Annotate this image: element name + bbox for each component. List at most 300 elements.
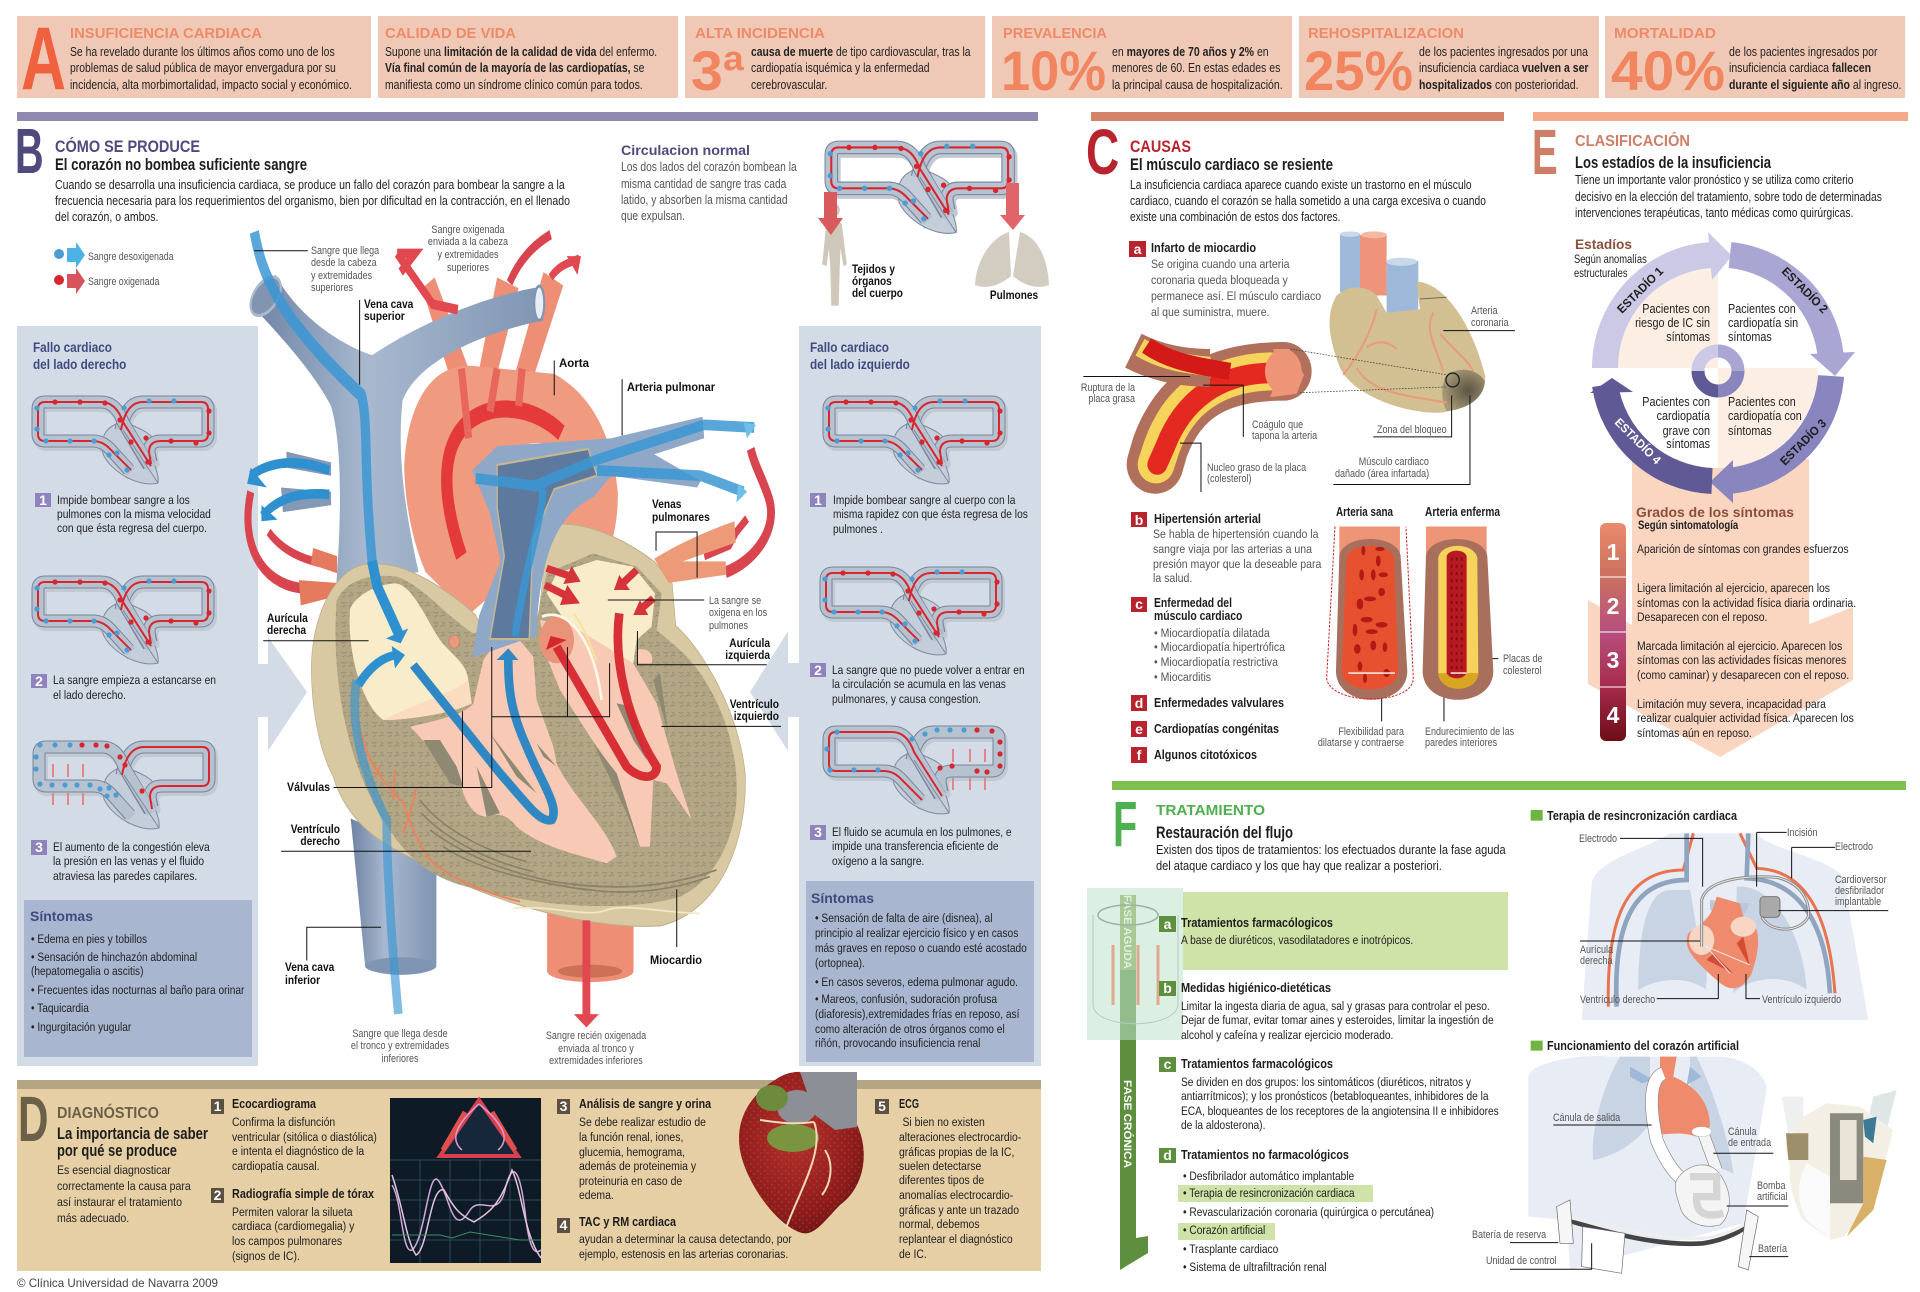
legend: blood types: Sangre desoxigenada	[88, 251, 174, 263]
cause a	[1129, 240, 1321, 319]
item 3 analisis: glucemia, hemograma,	[579, 1146, 685, 1159]
resync labels: Cardioversor	[1835, 874, 1887, 886]
arrow: pale pointing to heart	[258, 637, 307, 751]
artery labels: Flexibilidad para	[1338, 726, 1404, 738]
resync labels: implantable	[1835, 896, 1881, 908]
pulmonary artery	[472, 417, 704, 658]
cause f: f	[1137, 747, 1142, 763]
footer credit: © Clínica Universidad de Navarra 2009	[17, 1276, 218, 1290]
main heart: great vessels in front and outer flows	[397, 235, 771, 1027]
step 1: Impide bombear sangre a los	[57, 494, 190, 507]
symptoms grades: (como caminar) y desaparecen con el reposo.	[1637, 669, 1849, 682]
stages cycle: ESTADÍO 2	[1779, 265, 1831, 316]
section E header: intervenciones terapéuticas, tanto médicas como quirúrgicas.	[1575, 206, 1853, 220]
heart labels: Aurícula	[729, 637, 771, 650]
stages cycle: síntomas	[1728, 329, 1772, 344]
section E header: Tiene un importante valor pronóstico y se utiliza como criterio	[1575, 173, 1854, 187]
treatment a	[1159, 915, 1413, 947]
translucent cylinder overlay	[1087, 888, 1183, 1040]
symptoms box: right side: • Ingurgitación yugular	[31, 1021, 132, 1034]
panel: left side failure: Fallo cardiaco	[810, 339, 889, 355]
cause a: Se origina cuando una arteria	[1151, 258, 1290, 271]
main heart: interior chambers	[336, 553, 737, 913]
arrow: pale pointing to heart from right	[750, 631, 799, 751]
section F header: F	[1113, 790, 1137, 860]
center mini cycle	[1698, 351, 1738, 391]
heart labels: inferiores	[381, 1053, 419, 1065]
section B header: B	[15, 117, 44, 187]
section F header: Existen dos tipos de tratamientos: los efectuados durante la fase aguda	[1156, 842, 1506, 857]
heart labels: izquierda	[725, 649, 771, 662]
cause c: • Miocardiopatía dilatada	[1154, 627, 1270, 640]
resync labels: Ventrículo derecho	[1580, 994, 1655, 1006]
stages heading: Según anomalías	[1574, 253, 1647, 266]
legend: blood types: Sangre oxigenada	[88, 276, 160, 288]
cause c	[1131, 596, 1286, 684]
artificial heart illustration	[1510, 1041, 1788, 1273]
item 5 ecg: suelen detectarse	[899, 1160, 981, 1173]
left ventricle trabeculae	[593, 649, 668, 847]
right pulmonary veins/arteries	[281, 452, 331, 512]
resync labels: derecha	[1580, 955, 1613, 967]
stages cycle: ESTADÍO 4	[1612, 416, 1664, 467]
superior vena cava	[251, 275, 544, 583]
item 5 ecg: 5	[878, 1098, 886, 1114]
item 4 tac: TAC y RM cardiaca	[579, 1214, 677, 1229]
heart labels: Sangre oxigenada	[431, 224, 505, 236]
big letter A: A	[21, 9, 66, 109]
healthy artery	[1327, 527, 1413, 700]
cause f: Algunos citotóxicos	[1154, 747, 1257, 762]
panel: left side failure: del lado izquierdo	[810, 356, 910, 372]
section C header	[1086, 117, 1486, 224]
section B header: CÓMO SE PRODUCE	[55, 137, 200, 156]
step 2	[810, 662, 1025, 706]
section C header: C	[1086, 117, 1119, 188]
artery section illustration	[1133, 346, 1304, 464]
section C header: cardiaco, cuando el corazón se halla sometido a una carga excesiva o cuando	[1130, 194, 1486, 208]
step 3: 3	[814, 824, 822, 840]
symptoms box: right side: Síntomas	[30, 908, 93, 924]
treatment c: de la aldosterona).	[1181, 1119, 1265, 1132]
banner: prevalencia: menores de 60. En estas edades es	[1112, 60, 1280, 75]
phase bar: FASE CRÓNICA	[1121, 1080, 1134, 1168]
heart labels: Vena cava	[364, 298, 414, 311]
cause a: al que suministra, muere.	[1151, 306, 1270, 319]
artery labels: coronaria	[1471, 317, 1509, 329]
symptoms grades: Ligera limitación al ejercicio, aparecen los	[1637, 582, 1830, 595]
panel D: diagnostico: DIAGNÓSTICO	[57, 1103, 159, 1122]
item 5 ecg	[875, 1096, 1022, 1261]
heart labels: derecho	[300, 835, 340, 848]
banner: alta incidencia: cardiopatía isquémica y la enfermedad	[751, 61, 930, 75]
striated myocardium	[420, 800, 717, 892]
step 2: La sangre empieza a estancarse en	[53, 674, 216, 687]
banner: rehospitalizacion: hospitalizados con posterioridad.	[1419, 77, 1579, 92]
heading: resynchronization: Terapia de resincronización cardiaca	[1547, 808, 1738, 823]
step 1	[810, 492, 1028, 536]
coronary vessels	[362, 733, 520, 902]
heart outer wall	[311, 524, 745, 926]
item 1 ecocardiograma: ventricular (sitólica o diastólica)	[232, 1131, 377, 1144]
artery labels: Zona del bloqueo	[1377, 424, 1447, 436]
heart labels: derecha	[267, 624, 307, 637]
section B header: El corazón no bombea suficiente sangre	[55, 155, 307, 174]
artery labels: tapona la arteria	[1252, 430, 1317, 442]
treatment b	[1159, 980, 1494, 1042]
artery labels: placa grasa	[1088, 393, 1135, 405]
labels: tissues and lungs: Pulmones	[990, 289, 1038, 302]
banner: rehospitalizacion: REHOSPITALIZACION	[1308, 26, 1464, 42]
panel D: diagnostico: La importancia de saber	[57, 1124, 208, 1143]
normal circulation diagram	[818, 144, 1049, 305]
normal circulation text: misma cantidad de sangre tras cada	[621, 177, 787, 191]
banner: alta incidencia: 3ª	[691, 39, 744, 102]
panel: right side failure: del lado derecho	[33, 356, 126, 372]
banner: insuficiencia cardiaca: INSUFICIENCIA CARDIACA	[70, 26, 263, 42]
item 3 analisis	[557, 1096, 712, 1202]
banner: alta incidencia: ALTA INCIDENCIA	[695, 26, 826, 42]
banner: alta incidencia	[685, 16, 985, 102]
section F header: del ataque cardiaco y los que hay que realizar a posteriori.	[1156, 858, 1442, 873]
big pale arrow	[1588, 459, 1853, 757]
treatment d: • Trasplante cardiaco	[1183, 1243, 1278, 1256]
SVC blue flow	[254, 232, 372, 561]
treatment c: Se dividen en dos grupos: los sintomáticos (diuréticos, nitratos y	[1181, 1076, 1471, 1089]
symptoms grades: realizar cualquier actividad física. Aparecen los	[1637, 712, 1854, 725]
heart with infarct	[1290, 231, 1485, 413]
phase bar	[1120, 895, 1148, 1270]
resync labels: Electrodo	[1835, 841, 1873, 853]
step 3: atraviesa las paredes capilares.	[53, 870, 197, 883]
stages cycle: ESTADÍO 3	[1778, 416, 1829, 468]
symptoms grades: síntomas con la actividad física diaria ordinaria.	[1637, 597, 1856, 610]
grade bar: 2	[1607, 593, 1619, 619]
artery labels: Placas de	[1503, 653, 1543, 665]
section E header: Los estadíos de la insuficiencia	[1575, 153, 1771, 172]
cause e	[1131, 721, 1279, 737]
heart labels: Sangre que llega desde	[352, 1028, 448, 1040]
stages cycle: ESTADÍO 1	[1615, 264, 1666, 316]
cause a: a	[1134, 241, 1142, 257]
artificial heart labels: de entrada	[1728, 1137, 1771, 1149]
banner: prevalencia: 10%	[1001, 39, 1106, 102]
section F header: TRATAMIENTO	[1156, 802, 1265, 819]
banner: mortalidad	[1605, 16, 1905, 102]
resync labels: Electrodo	[1579, 833, 1617, 845]
banner: mortalidad: de los pacientes ingresados por	[1729, 44, 1878, 59]
cause e: e	[1135, 721, 1143, 737]
grade bar: 3	[1607, 647, 1619, 673]
stages cycle	[1590, 232, 1855, 503]
treatment a: A base de diuréticos, vasodilatadores e inotrópicos.	[1181, 934, 1413, 947]
heart labels: Arteria pulmonar	[627, 380, 715, 394]
descending aorta	[547, 910, 634, 982]
cause b: b	[1135, 512, 1143, 528]
main heart: blood flow arrows inside	[355, 561, 657, 1014]
legend: blood types	[54, 242, 174, 294]
section E header: decisivo en la elección del tratamiento, sobre todo de determinadas	[1575, 190, 1882, 204]
step 3	[810, 824, 1012, 868]
photo: artificial heart device	[1782, 1090, 1897, 1240]
stage 2 arc	[1730, 255, 1855, 376]
item 2 radiografia: los campos pulmonares	[232, 1235, 342, 1248]
step 1: pulmones con la misma velocidad	[57, 508, 211, 521]
section C header: CAUSAS	[1130, 138, 1191, 156]
item 2 radiografia: cardiaca (cardiomegalia) y	[232, 1220, 355, 1233]
step 1: Impide bombear sangre al cuerpo con la	[833, 494, 1016, 507]
artery labels: Coágulo que	[1252, 419, 1303, 431]
heart leader lines	[254, 251, 781, 961]
heart labels: superiores	[447, 262, 489, 274]
stage descriptions: síntomas	[1666, 436, 1710, 451]
treatment c: antiarrítmicos); y los pronósticos (betabloqueantes, inhibidores de la	[1181, 1090, 1489, 1103]
heart labels: oxigena en los	[709, 607, 767, 619]
banner: insuficiencia cardiaca	[17, 9, 371, 109]
item 5 ecg: Si bien no existen	[902, 1116, 985, 1129]
treatment c	[1159, 1056, 1499, 1132]
artery labels: dilatarse y contraerse	[1318, 737, 1404, 749]
banner: insuficiencia cardiaca: incidencia, alta morbimortalidad, impacto social y económico.	[70, 78, 352, 92]
heart labels: Ventrículo	[730, 698, 779, 711]
symptoms box: left side: riñón, provocando insuficiencia renal	[815, 1037, 980, 1050]
heart labels: Válvulas	[287, 780, 330, 794]
cause c: • Miocardiopatía restrictiva	[1154, 656, 1279, 669]
artery leader lines	[1083, 331, 1515, 721]
symptoms box: right side: • Taquicardia	[31, 1002, 90, 1015]
step 3: 3	[35, 839, 43, 855]
normal circulation text: Los dos lados del corazón bombean la	[621, 160, 797, 174]
item 5 ecg: de IC.	[899, 1248, 927, 1261]
small vessel	[449, 635, 460, 648]
section B header: del corazón, o ambos.	[55, 209, 158, 224]
item 3 analisis: Análisis de sangre y orina	[579, 1096, 712, 1111]
item 2 radiografia: Permiten valorar la silueta	[232, 1206, 353, 1219]
banner: insuficiencia cardiaca: Se ha revelado durante los últimos años como uno de los	[70, 45, 335, 59]
item 1 ecocardiograma	[211, 1096, 377, 1173]
treatment d: d	[1163, 1147, 1172, 1163]
treatment b: alcohol y cafeína y realizar ejercicio moderado.	[1181, 1029, 1393, 1042]
item 5 ecg: gráficas y ante un trazado	[899, 1204, 1019, 1217]
item 5 ecg: diferentes tipos de	[899, 1174, 984, 1187]
acute phase highlight	[1183, 892, 1508, 970]
stage descriptions: síntomas	[1666, 329, 1710, 344]
symptoms grades: Aparición de síntomas con grandes esfuerzos	[1637, 543, 1849, 556]
right ventricle trabeculae	[423, 733, 557, 817]
stage descriptions: grave con	[1663, 423, 1710, 438]
normal circulation text	[621, 142, 797, 223]
symptoms grades: Marcada limitación al ejercicio. Aparecen los	[1637, 640, 1843, 653]
cause b: sangre viaja por las arterias a una	[1153, 543, 1313, 556]
item 1 ecocardiograma: Ecocardiograma	[232, 1096, 317, 1111]
stages cycle: síntomas	[1728, 423, 1772, 438]
item 5 ecg: ECG	[899, 1096, 919, 1111]
treatment c: Tratamientos farmacológicos	[1181, 1056, 1333, 1071]
resynchronization illustration	[1531, 810, 1888, 1020]
symptoms grades: Desaparecen con el reposo.	[1637, 611, 1767, 624]
treatment d: • Sistema de ultrafiltración renal	[1183, 1261, 1326, 1274]
resync labels: Ventrículo izquierdo	[1762, 994, 1842, 1006]
item 4 tac: 4	[560, 1217, 568, 1233]
panel D: diagnostico: por qué se produce	[57, 1141, 177, 1160]
treatment b: b	[1163, 980, 1172, 996]
heart labels: enviada al tronco y	[558, 1043, 634, 1055]
treatment b: Medidas higiénico-dietéticas	[1181, 980, 1331, 995]
item 4 tac	[557, 1214, 792, 1261]
stages cycle: cardiopatía sin	[1728, 315, 1798, 330]
artery labels: Endurecimiento de las	[1425, 726, 1514, 738]
cause c: músculo cardiaco	[1154, 609, 1242, 623]
symptoms box: left side: como alteración de otros órganos como el	[815, 1023, 1005, 1036]
echo and ECG image	[390, 1098, 541, 1263]
aorta branches	[422, 272, 563, 379]
section E header: E	[1532, 117, 1558, 189]
symptoms box: left side: • Sensación de falta de aire (disnea), al	[815, 912, 992, 925]
item 5 ecg: replantear el diagnóstico	[899, 1233, 1013, 1246]
banner: mortalidad: MORTALIDAD	[1614, 26, 1716, 42]
stage descriptions: riesgo de IC sin	[1635, 315, 1710, 330]
heart labels: extremidades inferiores	[549, 1055, 643, 1067]
resync labels: Aurícula	[1580, 944, 1613, 956]
section C header: existe una combinación de estos dos factores.	[1130, 210, 1340, 224]
symptoms grades: síntomas con las actividades físicas menores	[1637, 654, 1847, 667]
heart labels	[267, 224, 779, 1067]
stages heading: Estadíos	[1575, 236, 1632, 252]
step 2: el lado derecho.	[53, 689, 126, 702]
section B header	[15, 117, 570, 224]
normal circulation text: que expulsan.	[621, 209, 685, 223]
heading: artificial heart: Funcionamiento del corazón artificial	[1547, 1038, 1739, 1053]
artery labels: colesterol	[1503, 665, 1542, 677]
item 4 tac: ejemplo, estenosis en las arterias coronarias.	[579, 1248, 788, 1261]
banner: insuficiencia cardiaca: problemas de salud pública de mayor envergadura por su	[70, 61, 336, 75]
banner: prevalencia: PREVALENCIA	[1003, 26, 1108, 42]
symptoms box: right side: • Sensación de hinchazón abdominal	[31, 951, 197, 964]
banner: alta incidencia: causa de muerte de tipo cardiovascular, tras la	[751, 45, 971, 59]
mitral valve and aortic root	[539, 617, 574, 663]
banner: prevalencia: en mayores de 70 años y 2% en	[1112, 44, 1269, 59]
banner: prevalencia	[992, 16, 1292, 102]
item 2 radiografia	[211, 1186, 375, 1263]
stage descriptions: Pacientes con	[1642, 394, 1710, 409]
section C header: El músculo cardiaco se resiente	[1130, 155, 1333, 174]
artery labels: Músculo cardiaco	[1359, 456, 1429, 468]
banner: rehospitalizacion: 25%	[1304, 39, 1413, 102]
treatment d: • Desfibrilador automático implantable	[1183, 1170, 1354, 1183]
heart labels: pulmonares	[652, 511, 710, 524]
artery labels: Arteria sana	[1336, 504, 1394, 519]
photo: CT heart	[739, 1072, 864, 1233]
artificial heart labels	[1472, 1112, 1788, 1267]
item 2 radiografia: (signos de IC).	[232, 1250, 300, 1263]
item 3 analisis: 3	[560, 1098, 568, 1114]
right atrium	[350, 583, 472, 720]
heart labels: Sangre recién oxigenada	[546, 1030, 646, 1042]
banner: calidad de vida: Supone una limitación de la calidad de vida del enfermo.	[385, 45, 657, 59]
step 2: 2	[814, 662, 822, 678]
section E header	[1532, 117, 1882, 220]
banner: calidad de vida: CALIDAD DE VIDA	[385, 26, 517, 42]
lower vena cava	[351, 819, 436, 975]
step 1: 1	[814, 492, 822, 508]
cause d	[1131, 695, 1284, 711]
cause a: permanece así. El músculo cardiaco	[1151, 290, 1321, 303]
icon: human figure	[823, 204, 846, 305]
item 5 ecg: alteraciones electrocardio-	[899, 1131, 1022, 1144]
aorta body	[404, 366, 618, 615]
banner: calidad de vida: manifiesta como un síndrome clínico común para todos.	[385, 78, 643, 92]
banner: calidad de vida	[378, 16, 678, 98]
section F header: Restauración del flujo	[1156, 823, 1293, 842]
section C header: La insuficiencia cardiaca aparece cuando existe un trastorno en el músculo	[1130, 178, 1472, 192]
heart labels: Sangre que llega	[311, 245, 379, 257]
step 3: impide una transferencia eficiente de	[832, 840, 999, 853]
panel: right side failure: Fallo cardiaco	[33, 339, 112, 355]
stages cycle: Pacientes con	[1728, 301, 1796, 316]
item 5 ecg: gráficas propias de la IC,	[899, 1146, 1014, 1159]
step 1: 1	[39, 492, 47, 508]
artificial heart labels: Cánula de salida	[1553, 1112, 1620, 1124]
symptoms box: left side	[806, 881, 1034, 1062]
schematic 2	[822, 569, 1000, 655]
artery labels: dañado (área infartada)	[1335, 468, 1429, 480]
stage 1 arc	[1605, 232, 1732, 368]
stage descriptions: Pacientes con	[1642, 301, 1710, 316]
step 2: La sangre que no puede volver a entrar en	[832, 664, 1025, 677]
step 3: El aumento de la congestión eleva	[53, 841, 210, 854]
artificial heart labels: Batería de reserva	[1472, 1229, 1546, 1241]
symptoms box: left side: (ortopnea).	[815, 957, 865, 970]
treatment b: Dejar de fumar, evitar tomar aines y esteroides, limitar la ingestión de	[1181, 1014, 1494, 1027]
grade bar: 4	[1607, 702, 1620, 728]
symptoms box: left side: principio al realizar ejercicio físico y en casos	[815, 927, 1019, 940]
step 3: El fluido se acumula en los pulmones, e	[832, 826, 1012, 839]
schematic 2	[34, 578, 212, 664]
artificial heart labels: Bomba	[1757, 1180, 1786, 1192]
panel: left side failure	[750, 326, 1041, 1066]
item 5 ecg: anomalías electrocardio-	[899, 1189, 1013, 1202]
symptoms grades: síntomas aún en reposo.	[1637, 727, 1752, 740]
step 3: la presión en las venas y el fluido	[53, 855, 204, 868]
section B header: frecuencia necesaria para los requerimientos del organismo, bien por dificultad en la contracción, en el llenado	[55, 193, 570, 208]
phase bar: FASE AGUDA	[1121, 895, 1133, 969]
artery labels: Nucleo graso de la placa	[1207, 462, 1307, 474]
symptoms box: left side: • Mareos, confusión, sudoración profusa	[815, 993, 998, 1006]
heart labels: izquierdo	[734, 710, 779, 723]
cause b: presión mayor que la deseable para	[1153, 558, 1322, 571]
heart labels: enviada a la cabeza	[428, 236, 508, 248]
stages cycle: Pacientes con	[1728, 394, 1796, 409]
treatment c: c	[1164, 1056, 1172, 1072]
symptoms box: right side: • Edema en pies y tobillos	[31, 933, 147, 946]
heart labels: y extremidades	[311, 270, 372, 282]
stage descriptions: cardiopatía	[1657, 408, 1710, 423]
panel D: diagnostico: correctamente la causa para	[57, 1180, 191, 1193]
cause a: coronaria queda bloqueada y	[1151, 274, 1288, 287]
stages heading	[1574, 236, 1647, 280]
item 1 ecocardiograma: cardiopatía causal.	[232, 1160, 320, 1173]
banner: calidad de vida: Vía final común de la mayoría de las cardiopatías, se	[385, 61, 645, 75]
heart labels: Aurícula	[267, 612, 309, 625]
stages heading: estructurales	[1574, 267, 1628, 280]
item 5 ecg: normal, debemos	[899, 1218, 980, 1231]
labels: tissues and lungs: órganos	[852, 275, 892, 288]
treatment d: • Revascularización coronaria (quirúrgica o percutánea)	[1183, 1206, 1434, 1219]
panel D: diagnostico: Es esencial diagnosticar	[57, 1164, 171, 1177]
schematic 3	[824, 727, 1003, 814]
treatment c: ECA, bloqueantes de los receptores de la angiotensina II e inhibidores	[1181, 1105, 1499, 1118]
step 3: oxígeno a la sangre.	[832, 855, 924, 868]
